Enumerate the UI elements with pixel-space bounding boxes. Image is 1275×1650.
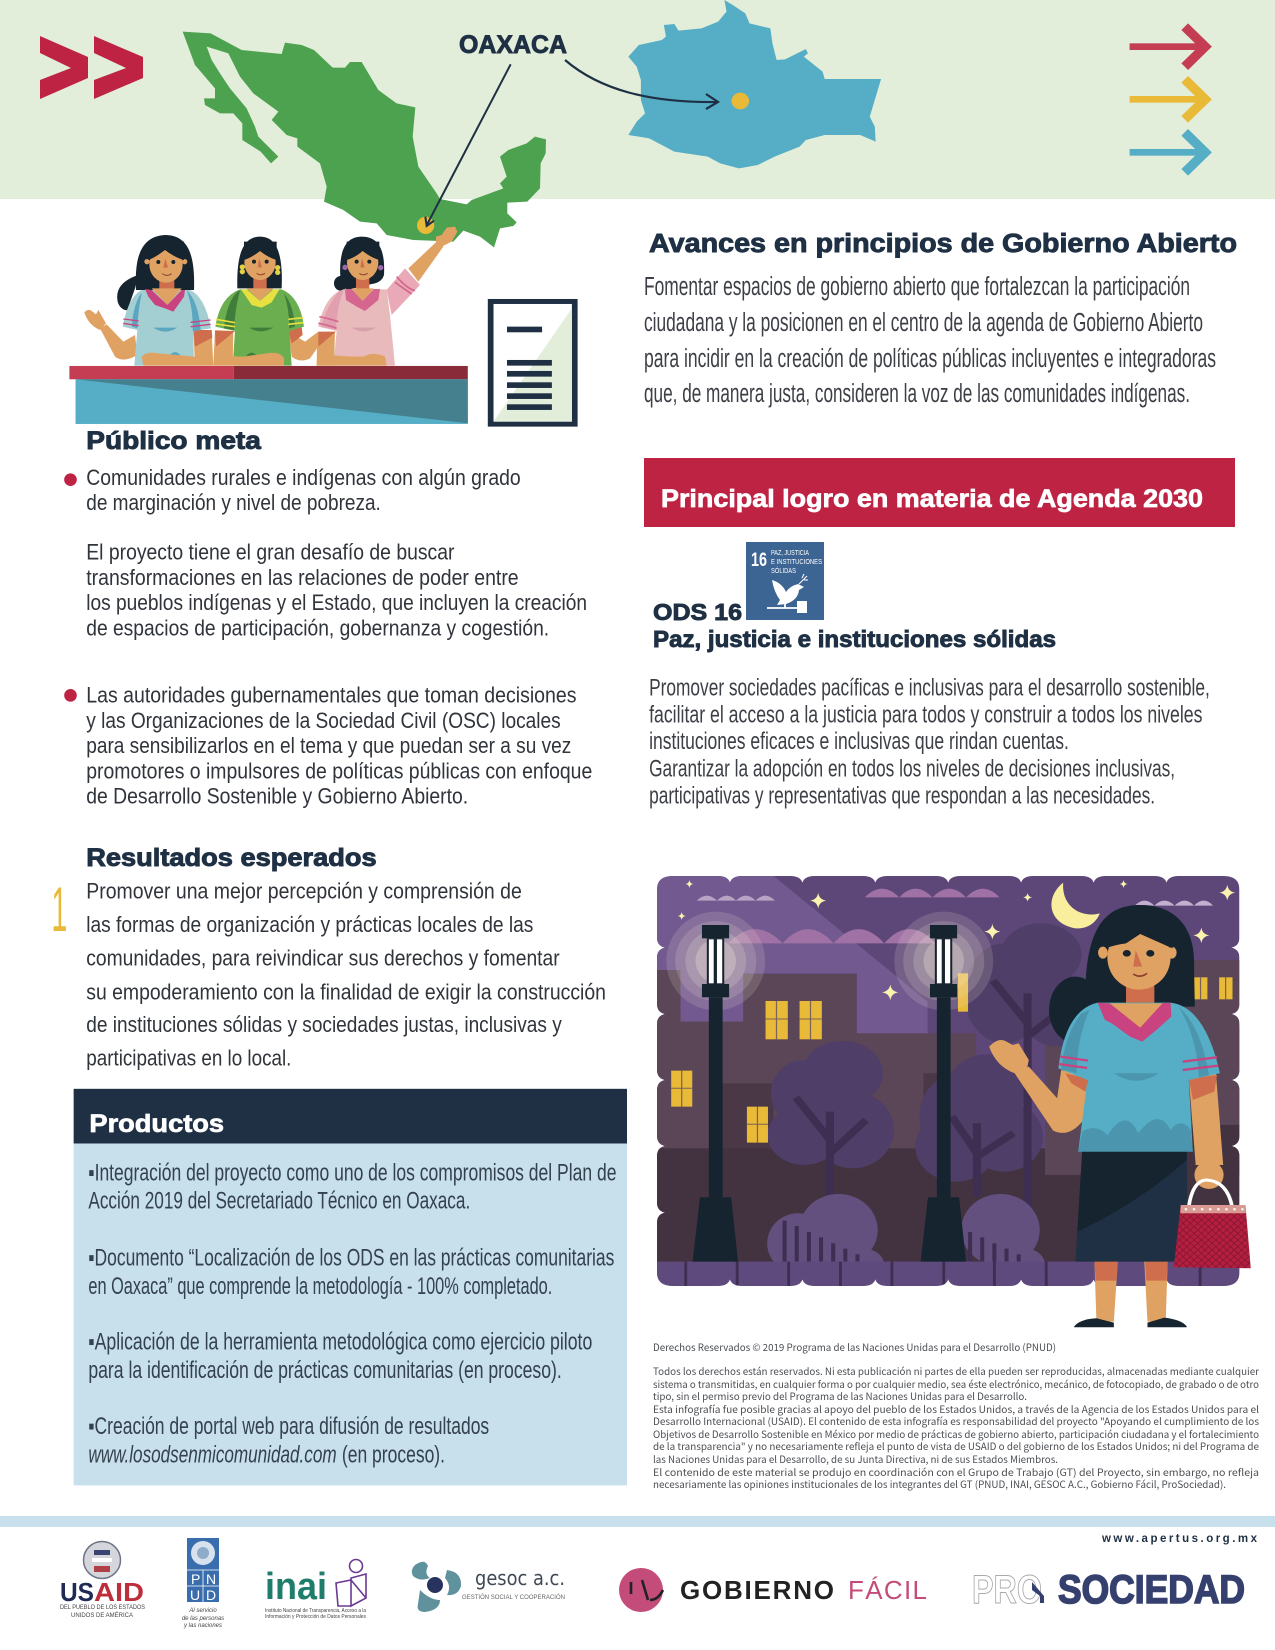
text: público meta second block: y las Organizaciones de la Sociedad Civil (OSC) locales	[86, 708, 561, 733]
map of Oaxaca state	[628, 0, 881, 168]
text: promover sociedades: instituciones eficaces e inclusivas que rindan cuentas.	[649, 728, 1069, 755]
logo: PNUD: N	[206, 1571, 216, 1587]
clouds	[697, 889, 1213, 943]
logo: PNUD: y las naciones	[183, 1623, 222, 1629]
productos list	[88, 1160, 616, 1468]
panel: productos	[74, 1089, 627, 1485]
illustration: night scene with woman	[657, 876, 1251, 1327]
logo: PNUD: Al servicio	[188, 1608, 217, 1614]
heading: Paz justicia: Paz, justicia e instituciones sólidas	[653, 626, 1056, 652]
icon: SDG 16 tile: PAZ, JUSTICIA	[771, 550, 809, 557]
logo: INAI: inai	[265, 1566, 327, 1608]
text: resultados esperados: su empoderamiento con la finalidad de exigir la construcción	[86, 979, 606, 1004]
icon: bullet two	[64, 689, 77, 702]
logo: GESOC	[412, 1562, 565, 1612]
moon	[1051, 883, 1100, 928]
logo: ProSociedad: PRO	[972, 1568, 1042, 1612]
text: público meta first block: los pueblos indígenas y el Estado, que incluyen la creación	[86, 590, 587, 615]
productos list: para la identificación de prácticas comunitarias (en proceso).	[88, 1358, 562, 1384]
text: público meta second block: Las autoridades gubernamentales que toman decisiones	[86, 683, 576, 708]
icon: three arrows	[1130, 23, 1212, 176]
logo: Gobierno Fácil: GOBIERNO	[680, 1575, 834, 1605]
text: legal notice	[653, 1340, 1260, 1491]
text: legal notice: de la transparencia" y no necesariamente refleja el punto de vista de USAID o del gobierno de los Estados Unidos; ni del Programa de	[653, 1439, 1260, 1453]
windows	[671, 973, 1233, 1143]
logo: Gobierno Fácil	[619, 1568, 927, 1612]
woman in pink blouse with raised arm	[317, 227, 457, 366]
productos header bar	[74, 1089, 627, 1144]
logo: GESOC: gesoc a.c.	[475, 1566, 565, 1590]
logo: INAI	[265, 1560, 366, 1620]
productos list: www.losodsenmicomunidad.com	[88, 1442, 337, 1468]
trees	[768, 923, 1094, 1182]
logo: INAI: Información y Protección de Datos Personales	[265, 1614, 366, 1620]
heading: Público meta: Público meta	[86, 427, 262, 455]
illustration: three women	[84, 227, 457, 366]
logo: INAI: Instituto Nacional de Transparencia, Acceso a la	[265, 1608, 366, 1614]
logo: USAID	[60, 1542, 146, 1619]
icon: SDG 16 tile	[746, 542, 824, 620]
text: legal notice: Desarrollo Internacional (USAID). El contenido de esta infografía es responsabilidad del proyecto "Apoyando el cumplimiento de los	[653, 1414, 1259, 1428]
logo: PNUD: de las personas	[182, 1616, 224, 1622]
logo: PNUD: U	[190, 1587, 200, 1603]
all overview-scaled text	[52, 427, 1210, 1485]
text: legal notice: Derechos Reservados © 2019 Programa de las Naciones Unidas para el Desarrollo (PNUD)	[653, 1340, 1056, 1354]
logo: ProSociedad	[972, 1568, 1245, 1612]
productos list: ▪Creación de portal web para difusión de resultados	[88, 1414, 489, 1440]
heading: ODS 16: ODS 16	[653, 599, 742, 625]
map of Mexico	[183, 32, 546, 247]
text: público meta second block: promotores o impulsores de políticas públicas con enfoque	[86, 758, 592, 783]
productos list: ▪Integración del proyecto como uno de los compromisos del Plan de	[88, 1160, 616, 1186]
heading: Resultados esperados: Resultados esperados	[86, 844, 377, 872]
stars	[678, 880, 1235, 1000]
logo: PNUD: D	[206, 1587, 216, 1603]
logo: USAID: DEL PUEBLO DE LOS ESTADOS	[60, 1604, 146, 1611]
productos list: (en proceso).	[342, 1442, 445, 1468]
text: resultados esperados: participativas en lo local.	[86, 1046, 291, 1071]
all overview-scaled text: 1	[52, 875, 67, 945]
woman in blue blouse	[84, 235, 213, 366]
header band	[0, 0, 1275, 199]
productos list: Acción 2019 del Secretariado Técnico en Oaxaca.	[88, 1189, 470, 1215]
productos body	[74, 1144, 627, 1485]
text: público meta second block	[86, 683, 592, 809]
text: promover sociedades	[649, 674, 1210, 810]
night background	[657, 876, 1239, 1286]
text: legal notice: El contenido de este material se produjo en coordinación con el Grupo de Trabajo (GT) del Proyecto, sin embargo, no refleja	[653, 1465, 1259, 1479]
text: resultados esperados: comunidades, para reivindicar sus derechos y fomentar	[86, 946, 560, 971]
productos list: en Oaxaca” que comprende la metodología - 100% completado.	[88, 1274, 552, 1300]
productos list: ▪Documento “Localización de los ODS en las prácticas comunitarias	[88, 1246, 614, 1272]
text: público meta first block: El proyecto tiene el gran desafío de buscar	[86, 540, 454, 565]
text: legal notice: Esta infografía fue posible gracias al apoyo del pueblo de los Estados Unidos, a través de la Agencia de los Estados Unidos para el	[653, 1402, 1259, 1416]
icon: double chevron	[40, 36, 143, 99]
street lamp left	[693, 925, 738, 1262]
logo: PNUD	[182, 1538, 224, 1629]
text: público meta first block: transformaciones en las relaciones de poder entre	[86, 565, 519, 590]
text: legal notice: tipo, sin el permiso previo del Programa de las Naciones Unidas para el Desarrollo.	[653, 1389, 1027, 1403]
text: legal notice: Objetivos de Desarrollo Sostenible en México por medio de prácticas de gobierno abierto, participación ciudadana y el fortalecimiento	[653, 1427, 1259, 1441]
logo: USAID: US	[60, 1577, 94, 1607]
street lamp right	[921, 925, 966, 1262]
desk and document	[69, 299, 578, 427]
text: legal notice: sistema o transmitidas, en cualquier forma o por cualquier medio, sea éste electrónico, mecánico, de fotocopiado, de grabado o de otro	[653, 1377, 1259, 1391]
footer strip	[0, 1516, 1275, 1527]
pavement	[657, 1262, 1239, 1286]
text: resultados esperados	[86, 878, 606, 1071]
bushes	[767, 1194, 1045, 1281]
logo: ProSociedad: SOCIEDAD	[1058, 1568, 1245, 1612]
lamp halos	[666, 912, 993, 1010]
text: público meta first block: de marginación y nivel de pobreza.	[86, 490, 381, 515]
text: legal notice: necesariamente las opiniones institucionales de los integrantes del GT (PNUD, INAI, GESOC A.C., Gobierno Fácil, ProSociedad).	[653, 1477, 1226, 1491]
logo: PNUD: P	[191, 1571, 200, 1587]
text: público meta first block: de espacios de participación, gobernanza y cogestión.	[86, 615, 549, 640]
text: resultados esperados: Promover una mejor percepción y comprensión de	[86, 878, 522, 903]
arrow: Oaxaca label to state	[565, 60, 718, 109]
text: resultados esperados: las formas de organización y prácticas locales de las	[86, 912, 533, 937]
footer url: www.apertus.org.mx	[1101, 1533, 1258, 1545]
heading: Avances en principios: Avances en principios de Gobierno Abierto	[649, 230, 1237, 258]
desk	[69, 366, 468, 424]
icon: SDG 16 tile: SÓLIDAS	[771, 566, 796, 575]
logo: USAID: UNIDOS DE AMÉRICA	[71, 1610, 134, 1619]
text: fomentar espacios	[644, 273, 1216, 408]
icon: SDG 16 tile: 16	[751, 550, 767, 571]
text: público meta second block: de Desarrollo Sostenible y Gobierno Abierto.	[86, 784, 468, 809]
text: legal notice: las Naciones Unidas para el Desarrollo, de su Junta Directiva, ni de sus Estados Miembros.	[653, 1452, 1058, 1466]
productos heading: Productos	[89, 1110, 224, 1138]
banner: principal logro: Principal logro en materia de Agenda 2030	[661, 485, 1203, 513]
text: legal notice: Todos los derechos están reservados. Ni esta publicación ni partes de ella pueden ser reproducidas, almacenadas mediante cualquier	[653, 1364, 1259, 1378]
text: resultados esperados: de instituciones sólidas y sociedades justas, inclusivas y	[86, 1012, 562, 1037]
text: público meta first block	[86, 465, 587, 640]
icon: bullet one	[64, 473, 77, 486]
logo: Gobierno Fácil: FÁCIL	[848, 1575, 927, 1605]
label: Oaxaca: OAXACA	[459, 31, 567, 59]
woman with handbag	[989, 905, 1251, 1327]
text: público meta first block: Comunidades rurales e indígenas con algún grado	[86, 465, 521, 490]
icon: SDG 16 tile: E INSTITUCIONES	[771, 559, 822, 566]
productos list: ▪Aplicación de la herramienta metodológica como ejercicio piloto	[88, 1330, 592, 1356]
banner: principal logro	[644, 458, 1235, 527]
icon: document	[488, 299, 578, 427]
logo: GESOC: GESTIÓN SOCIAL Y COOPERACIÓN	[462, 1594, 565, 1601]
text: público meta second block: para sensibilizarlos en el tema y que puedan ser a su vez	[86, 733, 571, 758]
woman in green blouse	[213, 237, 318, 366]
logo: USAID: AID	[94, 1577, 144, 1607]
